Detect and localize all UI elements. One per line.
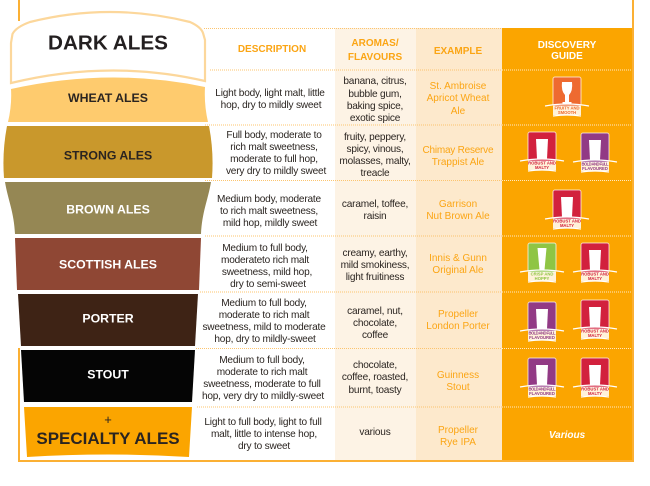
example [427, 81, 490, 117]
description [215, 88, 325, 111]
aromas: caramel, toffee, [342, 199, 408, 210]
row: wheat ales [215, 76, 589, 124]
row: strong ales [226, 130, 617, 179]
aromas: caramel, nut, [347, 306, 403, 317]
aromas [339, 132, 411, 179]
band: wheat ales [8, 77, 208, 122]
icon: crisp and hoppy badge: CRISP AND [531, 272, 553, 276]
aromas: light fruitiness [346, 272, 404, 283]
icon: robust and malty badge [545, 190, 589, 229]
icon: bold and full flavoured badge: BOLD AND FULL [528, 330, 556, 336]
description: hop, dry to mildly sweet [221, 100, 322, 111]
description [226, 130, 326, 177]
description: to rich malt sweetness, [220, 206, 318, 217]
description: moderate to rich malt [217, 367, 308, 378]
band: specialty ales: SPECIALTY ALES [36, 429, 180, 448]
example [437, 370, 479, 393]
icon: robust and malty badge: MALTY [588, 276, 602, 281]
example: St. Ambroise [430, 81, 487, 92]
aromas: various [359, 427, 391, 438]
description: dry to sweet [238, 441, 290, 452]
aromas: baking spice, [347, 101, 403, 112]
aromas [343, 76, 407, 124]
band: strong ales: STRONG ALES [64, 148, 152, 162]
description: malt, little to intense hop, [211, 429, 317, 440]
example: Apricot Wheat [427, 93, 490, 104]
heading: discovery guide [538, 40, 597, 62]
description: hop, very dry to mildly-sweet [202, 391, 324, 402]
icon: robust and malty badge: ROBUST AND [581, 386, 609, 392]
row: specialty ales [204, 417, 586, 452]
heading: aromas and flavours: FLAVOURS [348, 52, 402, 63]
icon: robust and malty badge: ROBUST AND [581, 272, 609, 276]
column: aromas background [335, 28, 416, 460]
example: Trappist Ale [432, 157, 485, 168]
row: porter [202, 298, 617, 345]
aromas: bubble gum, [348, 89, 402, 100]
icon: bold and full flavoured badge: BOLD AND FULL [528, 386, 556, 392]
description: Medium to full body, [219, 355, 305, 366]
example [429, 253, 487, 276]
aromas: banana, citrus, [343, 76, 407, 87]
band: scottish ales: SCOTTISH ALES [59, 258, 157, 272]
description: sweetness, mild to moderate [202, 322, 326, 333]
aromas: chocolate, [353, 360, 397, 371]
icon: robust and malty badge: MALTY [588, 391, 602, 396]
aromas: spicy, vinous, [346, 144, 404, 155]
description: Light body, light malt, little [215, 88, 325, 99]
description: Light to full body, light to full [204, 417, 322, 428]
aromas: creamy, earthy, [342, 248, 408, 259]
description [202, 298, 326, 345]
icon: robust and malty badge [573, 300, 617, 339]
example: Garrison [439, 199, 477, 210]
description: Medium to full body, [222, 243, 308, 254]
example: Innis & Gunn [429, 253, 487, 264]
aromas: coffee, roasted, [342, 372, 408, 383]
example: Nut Brown Ale [426, 211, 490, 222]
aromas [347, 306, 403, 341]
aromas: burnt, toasty [349, 385, 403, 396]
column headings [238, 38, 597, 63]
aromas: raisin [364, 211, 386, 222]
heading: aromas and flavours: AROMAS/ [351, 38, 399, 49]
band: wheat ales: WHEAT ALES [68, 91, 148, 105]
description: dry to semi-sweet [230, 279, 306, 290]
example [426, 309, 490, 332]
band: specialty ales [24, 407, 192, 457]
band: specialty ales: + [104, 412, 112, 427]
row: brown ales [217, 190, 589, 229]
icon: robust and malty badge: MALTY [588, 333, 602, 338]
description: mild hop, mildly sweet [223, 218, 318, 229]
description: Medium body, moderate [217, 194, 322, 205]
icon: bold and full flavoured badge: FLAVOURED [582, 166, 608, 171]
discovery guide: various: Various [549, 430, 586, 441]
glass rim: dark ales [11, 12, 205, 83]
icon: bold and full flavoured badge: FLAVOURED [529, 391, 555, 396]
band: scottish ales [15, 238, 201, 290]
description: hop, dry to mildly-sweet [214, 334, 316, 345]
aromas: coffee [362, 330, 389, 341]
band: stout: STOUT [87, 368, 129, 382]
row: scottish ales [221, 243, 617, 290]
band: porter [18, 294, 198, 346]
row: stout [202, 355, 617, 402]
aromas: chocolate, [353, 318, 397, 329]
description: very dry to mildly sweet [226, 166, 326, 177]
icon: bold and full flavoured badge [520, 358, 564, 397]
icon: crisp and hoppy badge: HOPPY [535, 276, 550, 281]
description: moderate to rich malt [219, 310, 310, 321]
heading: aromas and flavours [348, 38, 402, 63]
icon: crisp and hoppy badge [520, 243, 564, 282]
example [438, 425, 479, 448]
band: strong ales [3, 126, 213, 178]
example: Propeller [438, 425, 479, 436]
icon: fruity and smooth badge [545, 77, 589, 116]
icon: robust and malty badge [573, 243, 617, 282]
icon: fruity and smooth badge: SMOOTH [558, 110, 576, 115]
description [217, 194, 322, 229]
column: example background [416, 28, 502, 460]
aromas [342, 199, 408, 222]
heading: discovery guide: GUIDE [551, 51, 583, 62]
example: London Porter [426, 321, 490, 332]
example: Propeller [438, 309, 479, 320]
icon: robust and malty badge [573, 358, 617, 397]
band: stout [21, 350, 195, 402]
icon: bold and full flavoured badge [573, 133, 617, 172]
icon: bold and full flavoured badge: BOLD AND FULL [582, 162, 609, 166]
aromas [341, 248, 409, 283]
icon: robust and malty badge: MALTY [535, 165, 549, 170]
heading: example: EXAMPLE [434, 46, 482, 57]
icon: robust and malty badge: MALTY [560, 223, 574, 228]
description: Medium to full body, [221, 298, 307, 309]
example: Chimay Reserve [422, 145, 494, 156]
example: Ale [451, 106, 466, 117]
description: Full body, moderate to [226, 130, 322, 141]
aromas: mild smokiness, [341, 260, 409, 271]
aromas: exotic spice [350, 113, 401, 124]
table row dividers [196, 28, 632, 407]
icon: robust and malty badge: ROBUST AND [553, 218, 581, 224]
icon: robust and malty badge [520, 132, 564, 171]
band: brown ales: BROWN ALES [66, 202, 150, 216]
band: brown ales [5, 182, 211, 234]
description: rich malt sweetness, [230, 142, 318, 153]
band: porter: PORTER [82, 312, 134, 326]
icon: bold and full flavoured badge: FLAVOURED [529, 335, 555, 340]
aromas: treacle [361, 168, 390, 179]
description [202, 355, 324, 402]
description [221, 243, 312, 290]
heading: description: DESCRIPTION [238, 44, 306, 55]
example [422, 145, 494, 168]
aromas: molasses, malty, [339, 156, 411, 167]
heading: discovery guide: DISCOVERY [538, 40, 597, 51]
beer glass [3, 12, 213, 457]
icon: fruity and smooth badge: FRUITY AND [554, 106, 580, 110]
aromas: fruity, peppery, [344, 132, 406, 143]
description: moderateto rich malt [221, 255, 309, 266]
example: Guinness [437, 370, 479, 381]
aromas [342, 360, 408, 396]
example: Rye IPA [440, 437, 476, 448]
description: sweetness, mild hop, [222, 267, 312, 278]
icon: bold and full flavoured badge [520, 302, 564, 341]
example: Original Ale [432, 265, 484, 276]
description [204, 417, 322, 452]
description: moderate to full hop, [230, 154, 318, 165]
example: Stout [446, 382, 470, 393]
glass rim: dark ales: DARK ALES [48, 32, 168, 54]
column: discovery guide background [502, 28, 632, 460]
icon: robust and malty badge: ROBUST AND [581, 328, 609, 334]
description: sweetness, moderate to full [203, 379, 321, 390]
icon: robust and malty badge: ROBUST AND [528, 160, 556, 166]
example [426, 199, 490, 222]
